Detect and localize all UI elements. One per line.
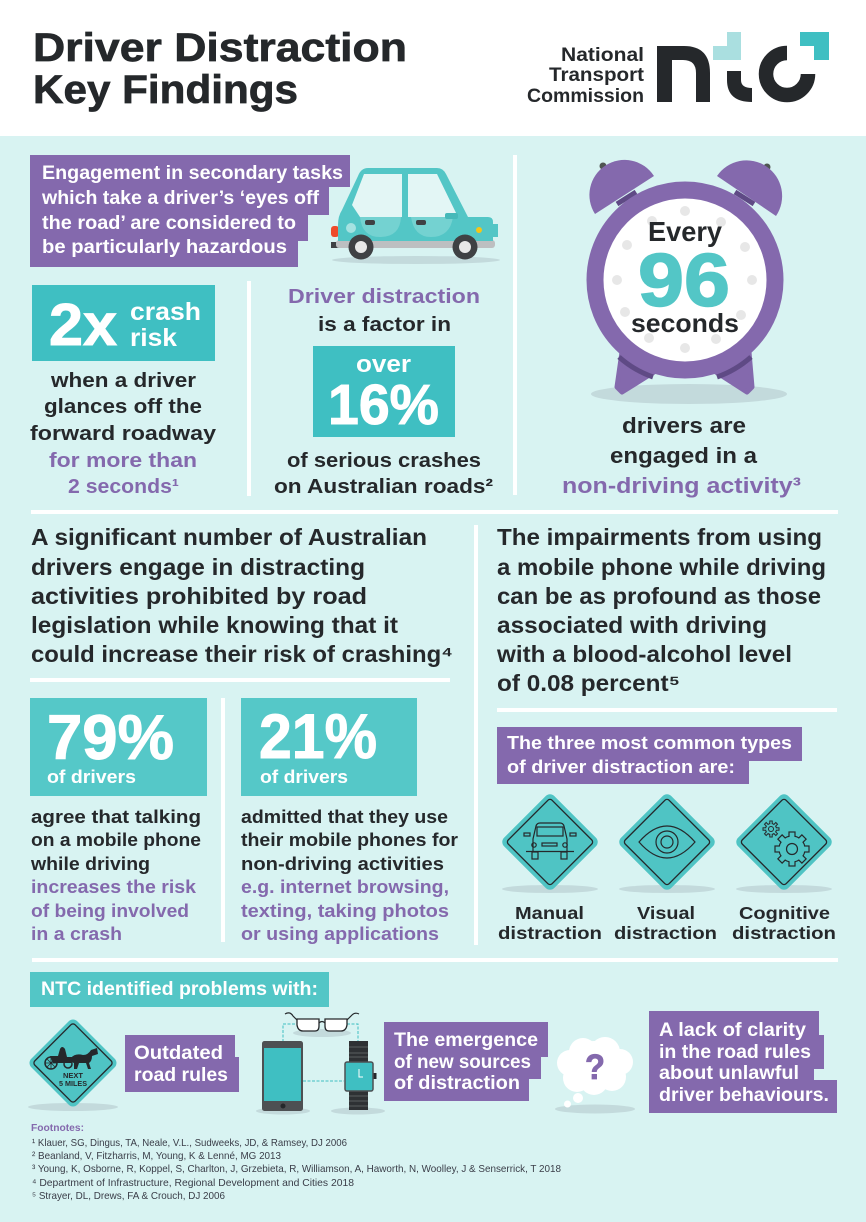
callout: new sources of distraction: of new sources [394,1051,531,1073]
title [33,26,407,112]
icon: horse carriage sign: NEXT [63,1073,84,1080]
text: non-driving phone use: admitted that they use [241,806,448,827]
footnotes: ⁴ Department of Infrastructure, Regional Development and Cities 2018 [32,1177,354,1189]
stat box: 2x crash risk: 2x [49,292,117,358]
text: prohibited activities: A significant number of Australian [31,524,427,550]
icon: alarm clock: seconds [631,308,739,338]
callout: lack of clarity [649,1011,837,1113]
labels: distraction types: Visual [637,903,695,923]
text: serious crashes [274,449,493,498]
logo: National Transport Commission: National [561,44,644,66]
icon: horse carriage sign [27,1017,119,1111]
footnotes [31,1123,561,1202]
text: prohibited activities: legislation while knowing that it [31,612,398,638]
labels: distraction types: distraction [498,923,602,943]
icon: car [331,168,500,264]
text: glance off forward roadway [30,369,217,498]
text: non-driving phone use: e.g. internet browsing, [241,876,449,897]
heading: three most common types: of driver distraction are: [507,757,735,777]
stat box: over 16%: over [356,351,411,378]
stat box: 21% of drivers [241,698,417,796]
logo: National Transport Commission [527,32,829,107]
text: non-driving phone use: texting, taking photos [241,900,449,921]
icon: question thought cloud: ? [585,1048,605,1087]
callout: outdated road rules: Outdated [134,1042,223,1064]
callout: secondary tasks: which take a driver’s ‘eyes off [41,188,320,209]
stat box: over 16%: 16% [328,373,439,437]
text: talking on a mobile phone: increases the risk [31,876,197,897]
stat box: 79% of drivers: of drivers [47,766,136,787]
text: impairments from mobile phone: a mobile phone while driving [497,554,826,580]
text: impairments from mobile phone: associated with driving [497,612,767,638]
text: driver distraction is a factor [288,285,480,336]
text: talking on a mobile phone: while driving [30,853,150,874]
stat box: 79% of drivers: 79% [47,703,174,773]
text: impairments from mobile phone: can be as profound as those [497,583,821,609]
text: non-driving activity: engaged in a [610,443,758,468]
labels: distraction types [498,903,836,943]
callout: secondary tasks: the road’ are considered to [42,213,296,234]
callout: secondary tasks [30,155,350,267]
stat box: 2x crash risk: risk [130,324,177,352]
text: prohibited activities: could increase their risk of crashing⁴ [31,641,453,667]
heading: three most common types: The three most common types [507,733,792,753]
text: impairments from mobile phone [496,524,826,696]
text: non-driving phone use: non-driving activities [241,853,444,874]
text: impairments from mobile phone: of 0.08 percent⁵ [497,670,680,696]
text: glance off forward roadway: when a driver [50,369,196,392]
logo: National Transport Commission: Commission [527,85,644,107]
footnotes: ¹ Klauer, SG, Dingus, TA, Neale, V.L., Sudweeks, JD, & Ramsey, DJ 2006 [32,1137,347,1149]
text: serious crashes: on Australian roads² [274,475,493,498]
text: non-driving activity: drivers are [622,413,746,438]
text: glance off forward roadway: for more than [49,449,197,472]
stat box: 2x crash risk: crash [130,298,201,326]
footnotes: Footnotes: [31,1123,84,1134]
callout: lack of clarity: driver behaviours. [659,1084,829,1106]
text: driver distraction is a factor: Driver distraction [288,285,480,308]
text: impairments from mobile phone: The impairments from using [497,524,822,550]
heading: NTC identified problems: NTC identified problems with: [41,978,318,1000]
callout: new sources of distraction: of distraction [394,1072,520,1094]
callout: lack of clarity: about unlawful [659,1062,799,1084]
callout: new sources of distraction [384,1022,548,1101]
text: talking on a mobile phone: in a crash [31,923,122,944]
stat box: 2x crash risk [32,285,215,361]
icon: horse carriage sign: 5 MILES [59,1081,87,1088]
stat box: 21% of drivers: of drivers [260,766,348,787]
heading: NTC identified problems [30,972,329,1007]
footnotes: ² Beanland, V, Fitzharris, M, Young, K & Lenné, MG 2013 [32,1150,281,1162]
text: prohibited activities: activities prohibited by road [31,583,367,609]
labels: distraction types: Cognitive [739,903,830,923]
callout: outdated road rules: road rules [134,1064,228,1086]
icon: alarm clock: Every [648,216,722,247]
logo: National Transport Commission: Transport [549,64,645,86]
text: talking on a mobile phone: of being involved [31,900,189,921]
heading: three most common types [497,727,802,784]
text: prohibited activities: drivers engage in distracting [31,554,365,580]
callout: secondary tasks: Engagement in secondary tasks [42,163,343,184]
icon: connected phone, watch and glasses [256,1013,385,1114]
text: non-driving phone use: their mobile phones for [241,829,458,850]
text: non-driving phone use [241,806,458,944]
footnotes: ⁵ Strayer, DL, Drews, FA & Crouch, DJ 2006 [32,1190,225,1202]
title: Driver Distraction [33,26,407,70]
labels: distraction types: distraction [614,923,717,943]
title: Key Findings [33,68,298,112]
text: glance off forward roadway: forward roadway [30,422,217,445]
text: driver distraction is a factor: is a factor in [318,313,451,336]
icon: cognitive distraction sign [734,792,834,893]
icon: alarm clock: 96 [638,238,730,322]
stat box: over 16% [313,346,455,437]
icon: alarm clock [589,160,787,404]
icon: manual distraction sign [500,792,600,893]
labels: distraction types: distraction [732,923,836,943]
text: glance off forward roadway: glances off the [44,395,202,418]
text: non-driving phone use: or using applications [241,923,439,944]
text: talking on a mobile phone: agree that talking [31,806,201,827]
callout: lack of clarity: in the road rules [659,1041,811,1063]
text: impairments from mobile phone: with a blood-alcohol level [496,641,792,667]
text: non-driving activity: non-driving activity³ [562,473,802,498]
icon: visual distraction sign [617,792,717,893]
text: glance off forward roadway: 2 seconds¹ [68,475,179,498]
callout: outdated road rules [125,1035,239,1092]
callout: lack of clarity: A lack of clarity [659,1019,806,1041]
callout: new sources of distraction: The emergence [394,1029,538,1051]
text: non-driving activity [562,413,802,498]
text: prohibited activities [31,524,453,667]
text: talking on a mobile phone [30,806,201,944]
stat box: 21% of drivers: 21% [259,702,377,772]
callout: secondary tasks: be particularly hazardous [42,237,287,258]
labels: distraction types: Manual [515,903,584,923]
text: talking on a mobile phone: on a mobile phone [31,829,201,850]
text: serious crashes: of serious crashes [287,449,481,472]
stat box: 79% of drivers [30,698,207,796]
icon: question thought cloud [555,1037,635,1114]
footnotes: ³ Young, K, Osborne, R, Koppel, S, Charlton, J, Grzebieta, R, Williamson, A, Haworth, N, Woolley, J & Senserrick, T 2018 [32,1163,561,1175]
